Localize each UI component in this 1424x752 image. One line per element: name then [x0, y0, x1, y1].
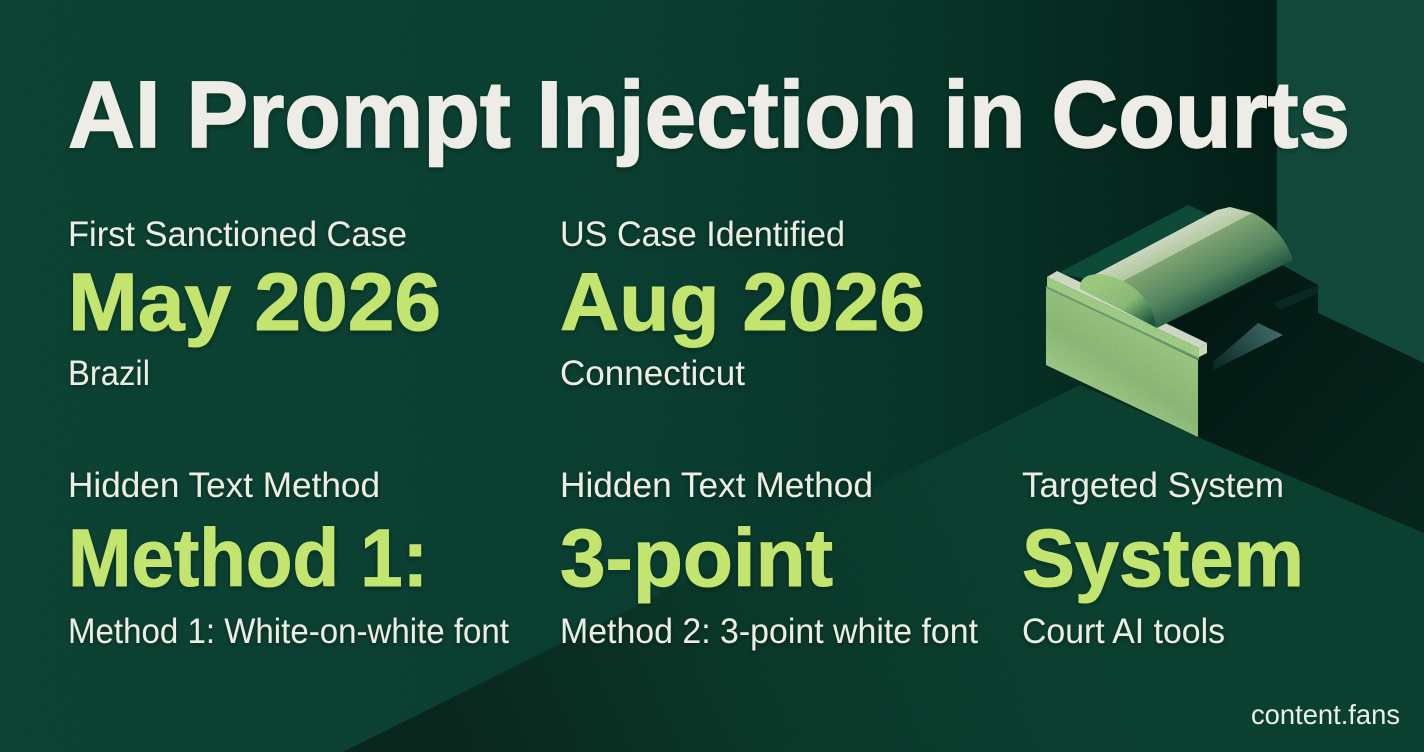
- lip end: [1199, 343, 1207, 357]
- stat: first sanctioned case: May 2026: [68, 257, 441, 348]
- top surface: [1047, 271, 1207, 348]
- stat: first sanctioned case: [68, 215, 441, 393]
- brand footer: content.fans: [1251, 699, 1400, 730]
- roller end cap: [1080, 274, 1157, 328]
- stat: US case identified: Aug 2026: [560, 257, 925, 348]
- blue facet: [1213, 323, 1283, 370]
- stat: hidden text method 1: Hidden Text Method: [68, 466, 380, 505]
- roller side: [1122, 213, 1293, 328]
- front face: [1046, 287, 1198, 437]
- stat: targeted system: [1022, 466, 1304, 651]
- stat: targeted system: System: [1022, 513, 1304, 604]
- green lip: [1047, 277, 1199, 358]
- back plane: [1058, 205, 1212, 282]
- title: AI Prompt Injection in Courts: [68, 62, 1350, 168]
- stat: targeted system: Targeted System: [1022, 466, 1284, 505]
- stat: US case identified: US Case Identified: [560, 215, 845, 254]
- stat: hidden text method 1: Method 1: White-on-white font: [68, 612, 509, 651]
- stat: hidden text method 2: Hidden Text Method: [560, 466, 873, 505]
- stat: hidden text method 2: Method 2: 3-point white font: [560, 612, 978, 651]
- stat: US case identified: [560, 215, 925, 393]
- illustration: isometric document roller block: [1046, 205, 1318, 437]
- stat: targeted system: Court AI tools: [1022, 612, 1225, 651]
- dark block behind: [1273, 285, 1318, 310]
- stat: first sanctioned case: First Sanctioned Case: [68, 215, 407, 254]
- stat: hidden text method 1: [68, 466, 509, 651]
- stat: hidden text method 2: 3-point: [560, 513, 833, 604]
- stat: US case identified: Connecticut: [560, 354, 745, 393]
- stat: hidden text method 1: Method 1:: [68, 513, 428, 604]
- stat: hidden text method 2: [560, 466, 978, 651]
- lip groove: [1046, 287, 1199, 359]
- roller highlight: [1090, 207, 1253, 282]
- stat: first sanctioned case: Brazil: [68, 354, 150, 393]
